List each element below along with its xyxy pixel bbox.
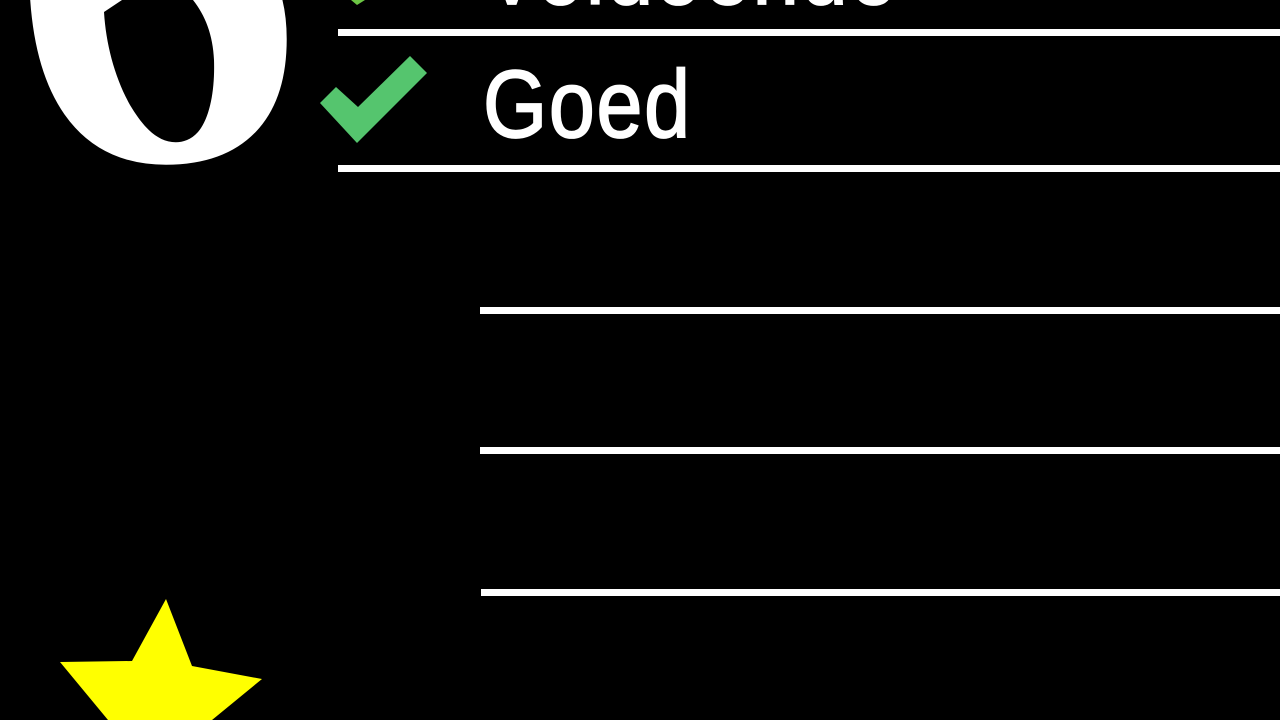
icon: green check mark [320,56,427,143]
empty row line 1 [480,307,1280,314]
divider under Goed [338,165,1280,172]
icon: yellow star [60,599,262,720]
empty row line 3 [481,589,1280,596]
icon: green check cut off at top [351,0,365,5]
rating row: Goed: Goed [483,50,692,157]
empty row line 2 [480,447,1280,454]
divider under Voldoende [338,29,1280,36]
